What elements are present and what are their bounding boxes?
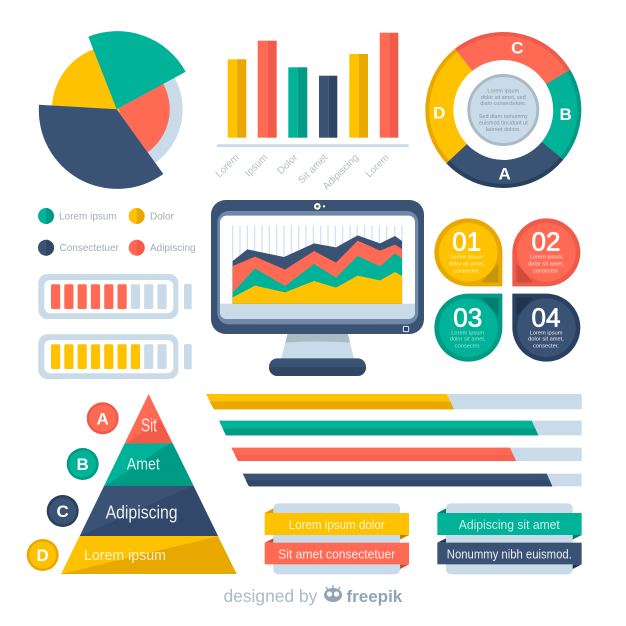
bar: Dolor bbox=[288, 67, 307, 138]
badge D: D bbox=[37, 546, 49, 565]
chart gridlines bbox=[233, 226, 402, 304]
legend item: Lorem ipsum bbox=[38, 208, 117, 224]
donut centre disc bbox=[469, 76, 538, 144]
brand name: freepik bbox=[346, 587, 403, 606]
drop 01 bbox=[434, 218, 502, 286]
pyramid level: Adipiscing bbox=[80, 486, 218, 536]
drop 01: dolor sit amet, bbox=[449, 261, 485, 267]
credit text: designed by bbox=[224, 586, 318, 606]
ribbon text: Nonummy nibh euismod: Nonummy nibh euismod. bbox=[447, 547, 572, 561]
monitor stand bbox=[281, 333, 354, 359]
pyramid level: Lorem ipsum bbox=[61, 536, 237, 574]
drop 02: dolor sit amet, bbox=[528, 261, 564, 267]
axis labels: Sit amet bbox=[296, 152, 330, 186]
segment letters bbox=[433, 38, 572, 184]
badge D bbox=[27, 539, 59, 571]
pyramid level: Amet bbox=[104, 443, 194, 486]
axis labels bbox=[214, 152, 392, 192]
badge C: C bbox=[57, 502, 69, 521]
legend item: Consectetuer bbox=[38, 240, 120, 256]
segment C bbox=[455, 32, 570, 84]
ribbon panel: left bbox=[265, 503, 409, 574]
segment letters: B bbox=[560, 105, 572, 124]
legend item: Lorem ipsum: Lorem ipsum bbox=[59, 212, 117, 222]
progress bars bbox=[206, 394, 582, 486]
area: teal bbox=[233, 253, 402, 304]
axis labels: Lorem bbox=[364, 152, 392, 180]
pyramid chart bbox=[27, 394, 237, 574]
area: yellow bbox=[233, 272, 402, 304]
segment D bbox=[425, 49, 472, 163]
ribbon text: Adipiscing sit amet: Adipiscing sit amet bbox=[459, 518, 560, 532]
badge B: B bbox=[77, 455, 89, 474]
area chart bbox=[233, 235, 402, 304]
ribbon text: Sit amet consectetuer: Sit amet consectetuer bbox=[278, 547, 395, 561]
donut centre text: Sed diam nonummy bbox=[479, 114, 528, 120]
axis labels: Ipsum bbox=[243, 152, 270, 179]
footer credit bbox=[224, 585, 403, 606]
drop 02: Lorem ipsum bbox=[530, 255, 563, 261]
drop 04 bbox=[512, 294, 580, 362]
pie slice: teal bbox=[88, 31, 186, 109]
drop 02: consecter. bbox=[533, 268, 559, 274]
axis labels: Lorem bbox=[214, 152, 242, 180]
battery: yellow bbox=[38, 334, 192, 379]
drop 01: Lorem ipsum bbox=[450, 255, 483, 261]
icon: freepik mascot bbox=[324, 585, 342, 602]
drop 04: consecter. bbox=[533, 344, 559, 350]
legend item: Dolor: Dolor bbox=[150, 212, 175, 222]
pie slice: yellow bbox=[52, 48, 120, 112]
legend item: Adipiscing bbox=[129, 240, 196, 256]
legend bbox=[38, 208, 196, 256]
badge B bbox=[67, 448, 99, 480]
monitor screen bbox=[220, 216, 415, 319]
pyramid level: Lorem ipsum: Lorem ipsum bbox=[84, 547, 166, 564]
chart axis bbox=[217, 144, 409, 147]
segment A bbox=[446, 142, 563, 188]
drop 03: dolor sit amet, bbox=[450, 337, 486, 343]
progress bar: navy bbox=[243, 474, 582, 486]
donut centre text: Lorem ipsum bbox=[487, 88, 520, 94]
monitor base bbox=[269, 358, 366, 376]
ribbon text: Lorem ipsum dolor: Lorem ipsum dolor bbox=[289, 518, 385, 532]
progress bar: teal bbox=[219, 421, 582, 435]
bar: Lorem bbox=[228, 59, 246, 138]
donut centre text: laoreet dolore. bbox=[486, 127, 521, 133]
drop 03 bbox=[434, 294, 502, 362]
legend item: Dolor bbox=[129, 208, 175, 224]
legend item: Adipiscing: Adipiscing bbox=[150, 243, 196, 254]
axis labels: Dolor bbox=[275, 152, 301, 177]
badge C bbox=[47, 495, 79, 527]
donut centre text: dolor sit amet, sed bbox=[481, 95, 526, 101]
drop 01: consecter. bbox=[454, 268, 480, 274]
drop 03: 03 bbox=[453, 303, 482, 333]
power button bbox=[403, 326, 409, 332]
pyramid level: Sit: Sit bbox=[141, 416, 157, 436]
drop 03: consecter. bbox=[455, 344, 481, 350]
pyramid level: Adipiscing: Adipiscing bbox=[106, 502, 178, 522]
drop 03: Lorem ipsum bbox=[451, 330, 484, 336]
monitor casing bbox=[211, 200, 424, 334]
area: navy bbox=[233, 235, 402, 304]
bar: Lorem 2 bbox=[380, 33, 398, 138]
screen footer strip bbox=[220, 304, 415, 319]
progress bar: coral bbox=[231, 448, 582, 461]
segment letters: D bbox=[433, 104, 445, 122]
donut centre text: diam consectetuer. bbox=[480, 101, 527, 107]
donut centre text: euismod tincidunt ut bbox=[479, 120, 528, 126]
bar: Sit amet bbox=[319, 76, 337, 138]
webcam bbox=[314, 203, 325, 210]
pyramid level: Amet: Amet bbox=[127, 454, 160, 473]
pyramid level: Sit bbox=[125, 394, 173, 443]
drop 01: 01 bbox=[452, 227, 481, 257]
monitor bbox=[211, 200, 424, 376]
segment letters: A bbox=[499, 164, 511, 184]
segment letters: C bbox=[511, 38, 523, 58]
pie slice: navy bbox=[39, 105, 163, 189]
bar: Adipiscing bbox=[349, 54, 368, 138]
badge A bbox=[87, 402, 119, 434]
drop 04: 04 bbox=[532, 303, 560, 333]
numbered drops bbox=[434, 218, 580, 362]
pie chart bbox=[39, 31, 186, 189]
progress bar: yellow bbox=[206, 394, 582, 409]
segment B bbox=[542, 70, 581, 160]
pie slice: coral bbox=[117, 84, 170, 152]
ribbon panel: right bbox=[437, 503, 582, 574]
legend item: Consectetuer: Consectetuer bbox=[60, 243, 120, 254]
donut chart bbox=[425, 32, 581, 188]
donut centre text bbox=[479, 88, 528, 133]
drop 02 bbox=[512, 218, 580, 286]
bar: Ipsum bbox=[258, 41, 277, 138]
badge A: A bbox=[97, 409, 109, 428]
pie slice: light backing bbox=[117, 78, 183, 163]
area: coral bbox=[233, 241, 402, 304]
axis labels: Adipiscing bbox=[321, 152, 361, 192]
bar chart bbox=[214, 33, 409, 192]
drop 02: 02 bbox=[532, 227, 560, 257]
battery: coral bbox=[38, 274, 192, 319]
monitor inner frame bbox=[217, 211, 418, 324]
drop 04: dolor sit amet, bbox=[528, 337, 564, 343]
drop 04: Lorem ipsum bbox=[530, 330, 563, 336]
